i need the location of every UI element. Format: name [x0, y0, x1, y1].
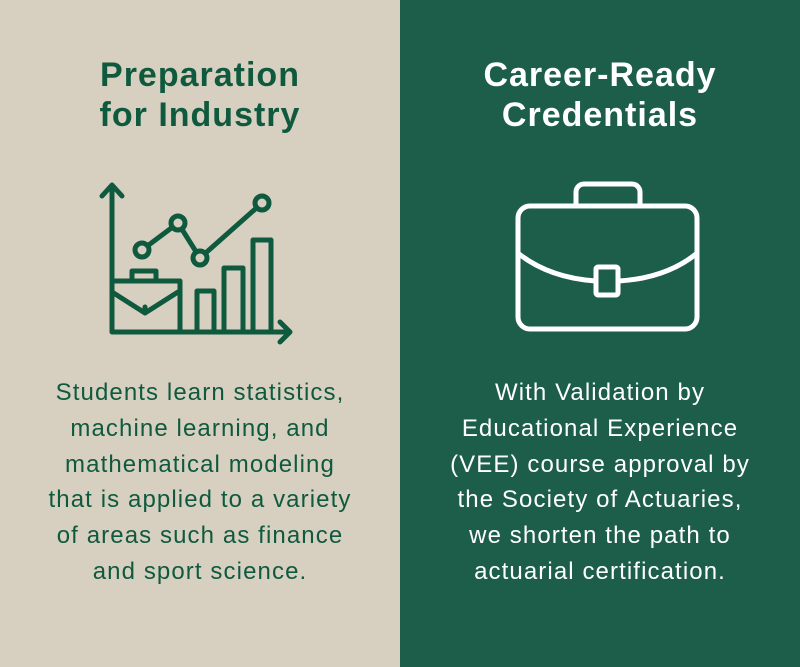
- text: preparation body: and sport science.: [93, 558, 307, 585]
- text: credentials body: Educational Experience: [462, 415, 738, 442]
- text: preparation body: machine learning, and: [70, 415, 330, 442]
- heading: credentials: [483, 56, 717, 134]
- text: credentials body: actuarial certification.: [474, 558, 726, 585]
- text: credentials body: [450, 379, 750, 585]
- panel: preparation for industry: [0, 0, 400, 667]
- text: preparation body: that is applied to a variety: [49, 486, 351, 513]
- text: preparation body: Students learn statistics,: [56, 379, 344, 406]
- text: credentials body: the Society of Actuaries,: [458, 486, 742, 513]
- panel: career-ready credentials: [400, 0, 800, 667]
- heading: preparation: Preparation: [100, 56, 300, 94]
- text: preparation body: mathematical modeling: [65, 451, 335, 478]
- text: credentials body: (VEE) course approval by: [450, 451, 750, 478]
- text: credentials body: With Validation by: [495, 379, 705, 406]
- heading: preparation: for Industry: [100, 96, 300, 134]
- heading: credentials: Career-Ready: [483, 56, 717, 94]
- text: preparation body: [48, 379, 351, 585]
- text: preparation body: of areas such as finance: [57, 522, 343, 549]
- icon: briefcase: [516, 182, 700, 332]
- heading: preparation: [100, 56, 300, 134]
- heading: credentials: Credentials: [502, 96, 698, 134]
- icon: chart with briefcase: [100, 182, 292, 344]
- text: credentials body: we shorten the path to: [469, 522, 731, 549]
